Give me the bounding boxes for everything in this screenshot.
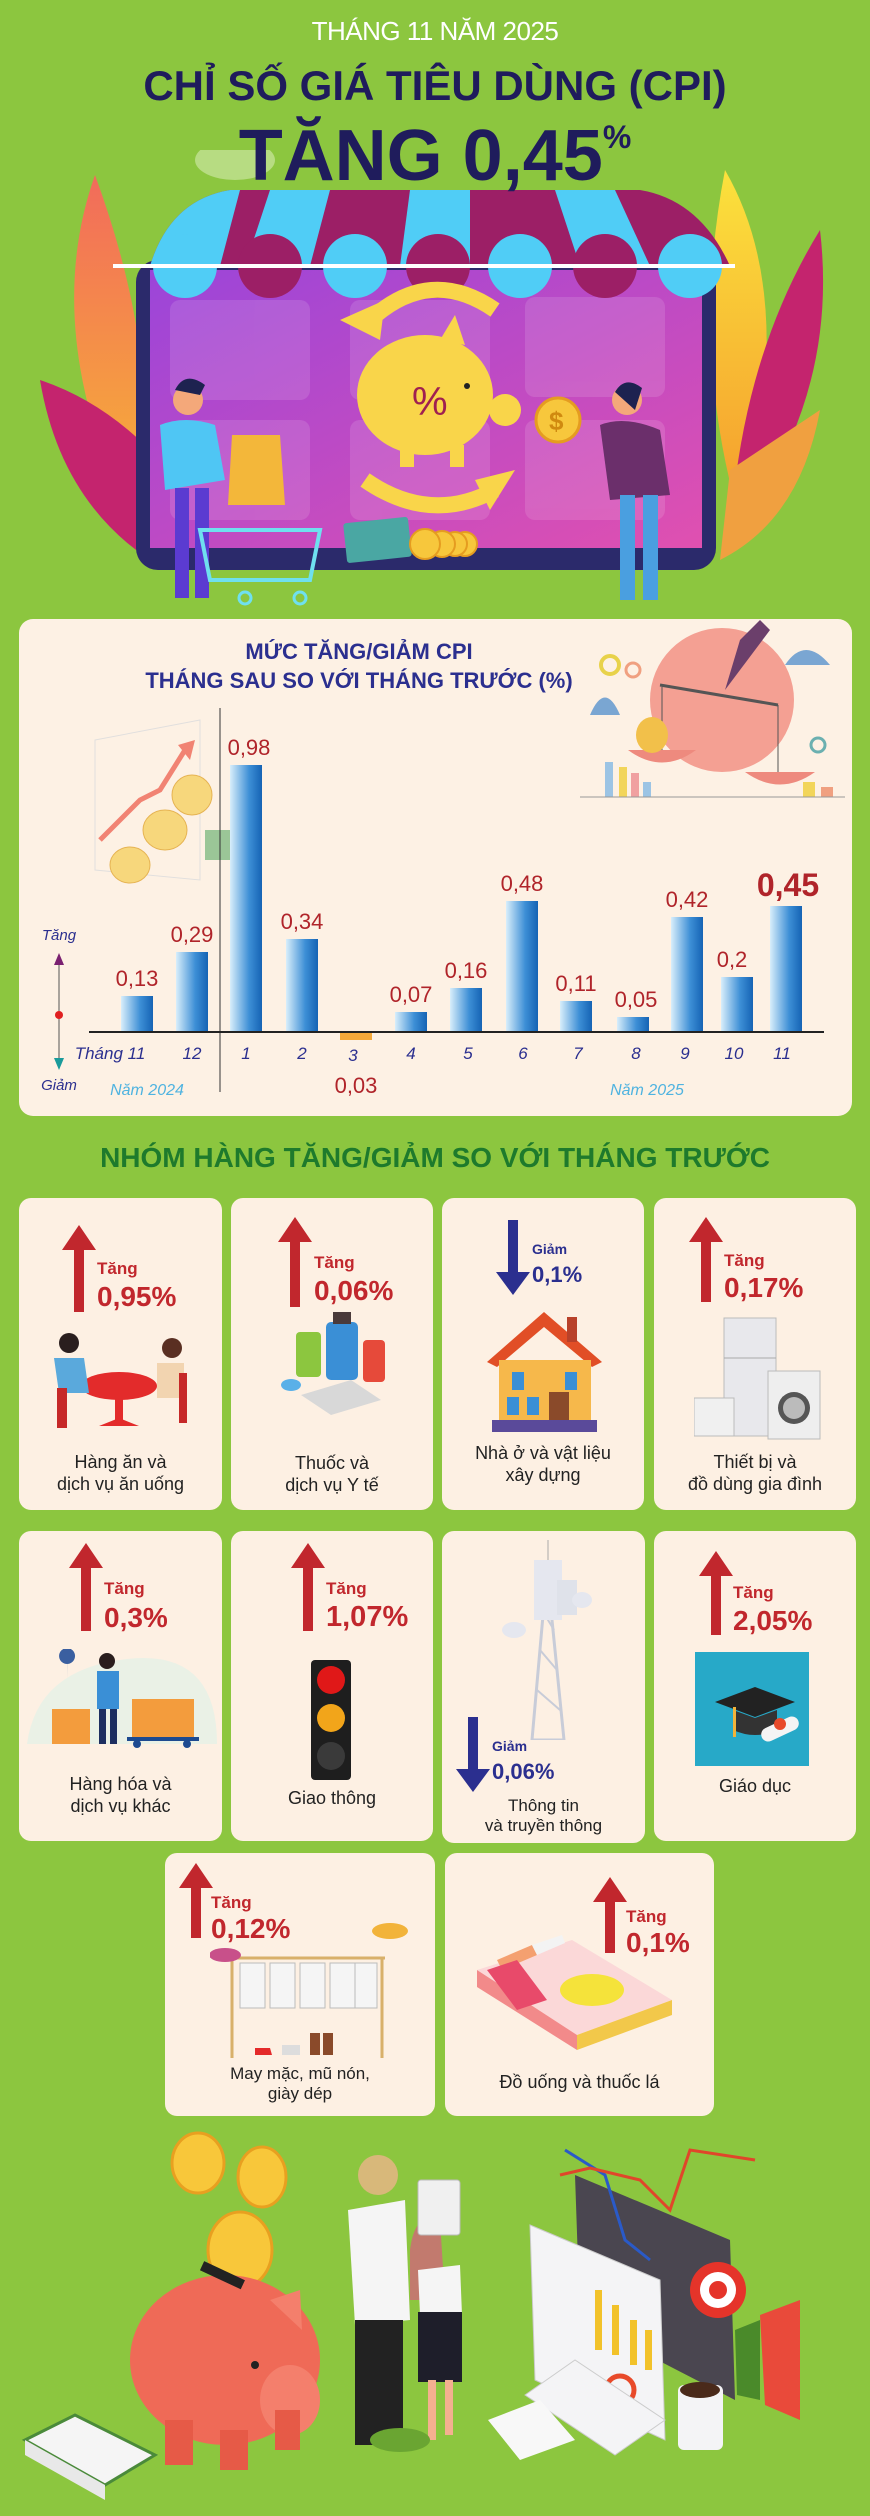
legend: Tăng/Giảm arrow: Giảm xyxy=(41,1077,77,1094)
card: transport xyxy=(231,1531,433,1841)
legend: Tăng/Giảm arrow: Tăng xyxy=(42,927,77,944)
label xyxy=(57,1452,184,1494)
label xyxy=(688,1452,822,1494)
person right: $ xyxy=(549,406,564,436)
cloud xyxy=(195,140,275,180)
month labels: 7 xyxy=(573,1044,583,1063)
month labels: 5 xyxy=(463,1044,473,1063)
card: food xyxy=(19,1198,222,1510)
label xyxy=(69,1774,172,1816)
value labels: 0,45 xyxy=(757,867,819,903)
label: Thiết bị và xyxy=(713,1452,797,1472)
label: Giao thông xyxy=(288,1788,376,1808)
axis xyxy=(89,1031,824,1033)
card and coins xyxy=(343,517,412,563)
illustration: scale (right) xyxy=(580,620,845,797)
month labels: 6 xyxy=(518,1044,528,1063)
value labels: 0,48 xyxy=(501,871,543,896)
value labels: 0,16 xyxy=(445,958,487,983)
piggy bank xyxy=(357,335,493,455)
card: telecom: 0,06% xyxy=(492,1759,554,1784)
card: household appliances xyxy=(654,1198,856,1510)
label: Hàng ăn và xyxy=(74,1452,167,1472)
bars xyxy=(121,765,802,1031)
icon: up arrow xyxy=(689,1217,723,1302)
illustration: coins growth (left) xyxy=(95,720,230,883)
panel: CPI monthly chart xyxy=(19,619,852,1116)
month labels: 2 xyxy=(296,1044,307,1063)
card: education: Tăng xyxy=(733,1583,774,1602)
dashboard monitor xyxy=(488,2150,800,2460)
month labels: 11 xyxy=(773,1044,791,1063)
value labels: 0,29 xyxy=(171,922,213,947)
screen frame xyxy=(136,260,716,570)
card: medicine: 0,06% xyxy=(314,1275,393,1306)
piggy bank xyxy=(130,2261,320,2470)
icon: up arrow xyxy=(69,1543,103,1631)
value labels: 0,11 xyxy=(555,971,597,996)
card: clothing: Tăng xyxy=(211,1893,252,1912)
yellow arrows xyxy=(370,290,495,320)
icon: delivery xyxy=(27,1649,217,1748)
person right xyxy=(536,382,670,600)
icon: up arrow xyxy=(291,1543,325,1631)
card: household appliances: 0,17% xyxy=(724,1272,803,1303)
chart heading: MỨC TĂNG/GIẢM CPI xyxy=(245,639,473,664)
label: xây dựng xyxy=(505,1465,581,1485)
label xyxy=(230,2064,370,2103)
card: education: 2,05% xyxy=(733,1605,812,1636)
year labels xyxy=(110,1082,684,1099)
title: increase value: TĂNG 0,45% xyxy=(239,116,631,196)
label: dịch vụ ăn uống xyxy=(57,1474,184,1494)
chart heading xyxy=(145,639,573,693)
month labels xyxy=(75,1044,791,1065)
card: clothing xyxy=(165,1853,435,2116)
card: education xyxy=(654,1531,856,1841)
title: month: THÁNG 11 NĂM 2025 xyxy=(312,16,558,46)
card: other goods: 0,3% xyxy=(104,1602,168,1633)
card: beverages and tobacco: Tăng xyxy=(626,1907,667,1926)
icon: house xyxy=(487,1312,602,1432)
icon: up arrow xyxy=(593,1877,627,1953)
icon: up arrow xyxy=(62,1225,96,1312)
label: dịch vụ Y tế xyxy=(285,1475,379,1495)
icon: down arrow xyxy=(496,1220,530,1295)
title: main heading: CHỈ SỐ GIÁ TIÊU DÙNG (CPI) xyxy=(143,62,727,109)
value labels: 0,42 xyxy=(666,887,708,912)
legend: Tăng/Giảm arrow xyxy=(41,927,77,1094)
value labels: 0,2 xyxy=(717,947,747,972)
icon: clothes rack xyxy=(210,1923,408,2058)
icon: medicine xyxy=(281,1312,385,1415)
card: housing xyxy=(442,1198,644,1510)
divider between years xyxy=(219,708,221,1092)
month labels: 8 xyxy=(631,1044,641,1063)
value labels xyxy=(116,735,819,1098)
card: other goods: Tăng xyxy=(104,1579,145,1598)
label xyxy=(285,1453,379,1495)
coins xyxy=(172,2133,286,2288)
label: Thuốc và xyxy=(295,1453,369,1473)
person left xyxy=(160,379,320,604)
value labels: 0,03 xyxy=(335,1073,377,1098)
card: medicine: Tăng xyxy=(314,1253,355,1272)
month labels: 10 xyxy=(725,1044,744,1063)
label: Đồ uống và thuốc lá xyxy=(499,2072,660,2092)
section heading: groups: NHÓM HÀNG TĂNG/GIẢM SO VỚI THÁNG TRƯỚC xyxy=(100,1142,770,1173)
label: Nhà ở và vật liệu xyxy=(475,1443,611,1463)
icon: appliances xyxy=(694,1318,820,1440)
chart heading: THÁNG SAU SO VỚI THÁNG TRƯỚC (%) xyxy=(145,668,573,693)
value labels: 0,98 xyxy=(228,735,270,760)
value labels: 0,13 xyxy=(116,966,158,991)
label: Giáo dục xyxy=(719,1776,791,1796)
label xyxy=(475,1443,611,1485)
value labels: 0,05 xyxy=(615,987,657,1012)
card: beverages and tobacco: 0,1% xyxy=(626,1927,690,1958)
card: telecom: Giảm xyxy=(492,1738,527,1754)
month labels: Tháng 11 xyxy=(75,1044,145,1063)
card: telecom xyxy=(442,1531,645,1843)
icon: cigarette pack xyxy=(477,1935,672,2050)
hero illustration: shop xyxy=(40,150,824,606)
label: Thông tin xyxy=(508,1796,579,1815)
icon: up arrow xyxy=(699,1551,733,1635)
card: household appliances: Tăng xyxy=(724,1251,765,1270)
money stack xyxy=(25,2415,155,2500)
icon: up arrow xyxy=(278,1217,312,1307)
icon: down arrow xyxy=(456,1717,490,1792)
month labels: 1 xyxy=(241,1044,251,1063)
card: transport: 1,07% xyxy=(326,1601,408,1633)
card: housing: Giảm xyxy=(532,1241,567,1257)
month labels: 4 xyxy=(406,1044,416,1063)
awning xyxy=(113,190,735,298)
bottom illustration xyxy=(22,2132,800,2500)
card: housing: 0,1% xyxy=(532,1262,582,1287)
label: dịch vụ khác xyxy=(70,1796,171,1816)
icon: traffic light xyxy=(311,1660,351,1780)
bar chart xyxy=(41,620,845,1099)
value labels: 0,07 xyxy=(390,982,432,1007)
hero illustration: shop: % xyxy=(412,380,448,424)
label: Hàng hóa và xyxy=(69,1774,172,1794)
month labels: 12 xyxy=(183,1044,202,1063)
year labels: Năm 2025 xyxy=(610,1082,684,1099)
icon: dining table xyxy=(54,1333,187,1428)
label: đồ dùng gia đình xyxy=(688,1474,822,1494)
card: clothing: 0,12% xyxy=(211,1913,290,1944)
card: other goods xyxy=(19,1531,222,1841)
year labels: Năm 2024 xyxy=(110,1082,184,1099)
icon: up arrow xyxy=(179,1863,213,1938)
card: food: 0,95% xyxy=(97,1281,176,1312)
leaves xyxy=(74,175,144,520)
label: giày dép xyxy=(268,2084,332,2103)
month labels: 3 xyxy=(348,1046,358,1065)
label: và truyền thông xyxy=(485,1816,602,1835)
month labels: 9 xyxy=(680,1044,690,1063)
card: beverages and tobacco xyxy=(445,1853,714,2116)
card: food: Tăng xyxy=(97,1259,138,1278)
label: May mặc, mũ nón, xyxy=(230,2064,370,2083)
icon: graduation xyxy=(695,1652,809,1766)
value labels: 0,34 xyxy=(281,909,323,934)
card: transport: Tăng xyxy=(326,1579,367,1598)
card: medicine xyxy=(231,1198,433,1510)
label xyxy=(485,1796,602,1835)
people xyxy=(348,2155,462,2452)
icon: tower xyxy=(502,1540,592,1740)
